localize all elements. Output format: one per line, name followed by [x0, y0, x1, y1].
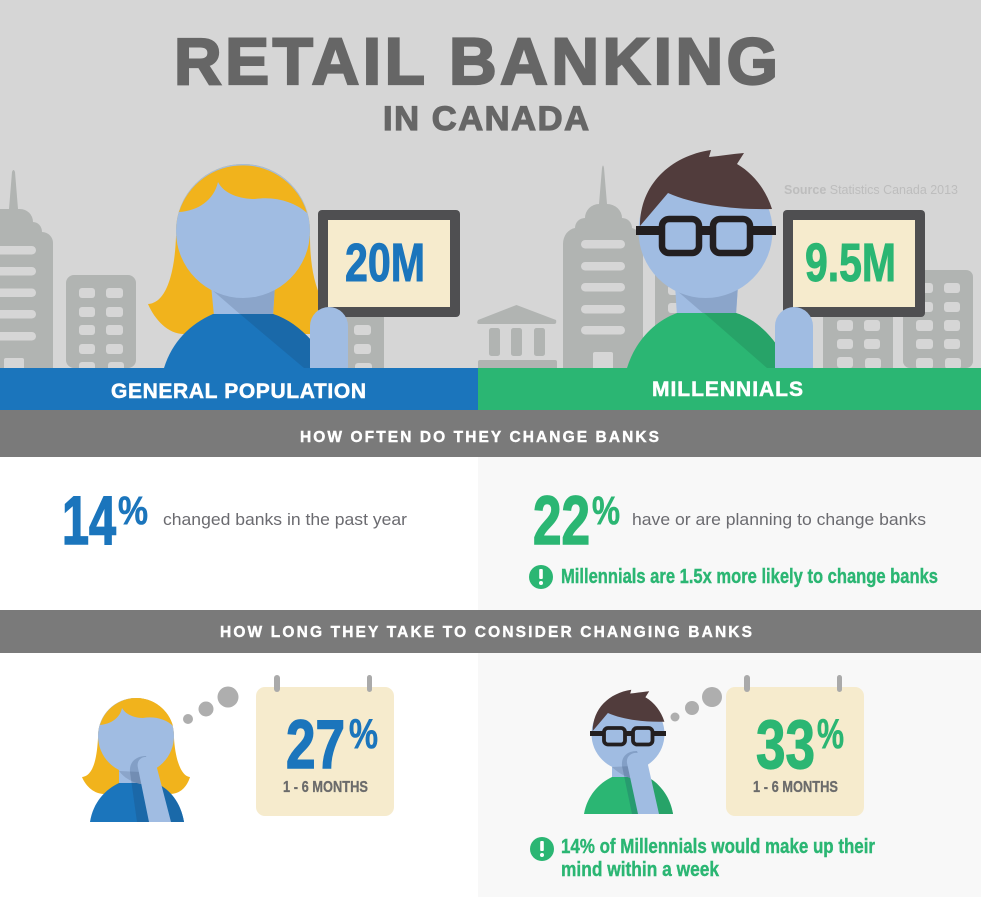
- label: 1 - 6 MONTHS: [283, 779, 368, 796]
- number: 22: [533, 482, 590, 559]
- arm: [138, 757, 171, 822]
- neck: [675, 285, 738, 316]
- neck shadow: [119, 771, 148, 784]
- character: woman with monitor: [148, 164, 460, 368]
- monitor screen: [793, 220, 915, 307]
- monitor: 20M: [318, 210, 460, 317]
- hair: [640, 150, 772, 226]
- icon: alert: [530, 837, 554, 861]
- title: RETAIL BANKING: [174, 24, 778, 98]
- percent sign: %: [817, 710, 844, 757]
- hair: [82, 738, 190, 794]
- raised arm: [775, 307, 813, 368]
- hair: [593, 690, 664, 731]
- skyline right: [563, 166, 973, 370]
- thought bubbles: [183, 686, 238, 724]
- hair crown: [176, 164, 310, 298]
- character: thinking man: [584, 690, 673, 814]
- banner: general population: [0, 368, 478, 410]
- arm shadow: [622, 751, 642, 814]
- hair fringe: [179, 165, 307, 213]
- number: 14: [62, 482, 116, 559]
- face: [98, 698, 174, 774]
- label: 1 - 6 MONTHS: [753, 779, 838, 796]
- torso shadow: [240, 314, 311, 368]
- icon: alert: [529, 565, 553, 589]
- neck shadow: [675, 285, 738, 314]
- value: 9.5M: 9.5M: [805, 233, 896, 293]
- torso: [164, 314, 311, 368]
- number: 27: [286, 706, 345, 783]
- character: man with monitor: [627, 150, 925, 368]
- calendar: 33 percent: [726, 675, 864, 816]
- skyline left: [0, 170, 384, 373]
- face: [592, 698, 664, 770]
- neck: [119, 765, 157, 785]
- character: thinking woman: [82, 698, 190, 822]
- neck shadow: [612, 766, 637, 778]
- description: changed banks in the past year: [163, 510, 407, 529]
- banner: millennials: [478, 368, 981, 410]
- torso shadow: [651, 779, 673, 814]
- section bar: how often: [0, 410, 981, 457]
- percent sign: %: [118, 489, 148, 533]
- face: [176, 164, 310, 298]
- value: 20M: 20M: [345, 233, 425, 293]
- number: 33: [756, 706, 815, 783]
- calendar pegs: [274, 675, 372, 692]
- label: general population: GENERAL POPULATION: [111, 380, 366, 403]
- section bar: how long: [0, 610, 981, 653]
- panel: lower right background: [478, 457, 981, 897]
- neck: [211, 285, 275, 316]
- torso: [627, 313, 776, 368]
- arm: [627, 753, 659, 814]
- percent sign: %: [592, 489, 620, 533]
- stat: 22 percent: [533, 482, 926, 559]
- percent sign: %: [349, 710, 378, 757]
- glasses: [636, 219, 776, 253]
- torso shadow: [160, 785, 184, 822]
- torso: [90, 783, 184, 822]
- source note: Source Statistics Canada 2013: [784, 183, 958, 197]
- panel: lower left background: [0, 457, 478, 897]
- thought bubbles: [670, 687, 722, 722]
- heading: how long: HOW LONG THEY TAKE TO CONSIDER CHANGING BANKS: [220, 624, 752, 641]
- face: [638, 164, 772, 298]
- header background: [0, 0, 981, 410]
- neck: [612, 760, 648, 782]
- torso shadow: [704, 313, 776, 368]
- subtitle: IN CANADA: [383, 100, 589, 138]
- calendar: 27 percent: [256, 675, 394, 816]
- arm shadow: [130, 756, 151, 822]
- monitor: 9.5M: [783, 210, 925, 317]
- hair crown: [98, 698, 174, 774]
- neck shadow: [211, 285, 275, 315]
- description: have or are planning to change banks: [632, 510, 926, 529]
- glasses: [590, 728, 666, 744]
- hair back: [148, 236, 322, 334]
- label: millennials: MILLENNIALS: [652, 378, 803, 401]
- fringe: [100, 698, 173, 726]
- stat: 14 percent: [62, 482, 407, 559]
- callout: within a week: 14% of Millennials would make up their: [561, 835, 875, 858]
- monitor screen: [328, 220, 450, 307]
- calendar pegs: [744, 675, 842, 692]
- callout: within a week: mind within a week: [561, 858, 720, 881]
- callout: within a week: [561, 835, 875, 881]
- torso: [584, 777, 673, 814]
- icon: bank building: [477, 305, 557, 370]
- raised arm: [310, 307, 348, 368]
- heading: how often: HOW OFTEN DO THEY CHANGE BANKS: [300, 429, 659, 446]
